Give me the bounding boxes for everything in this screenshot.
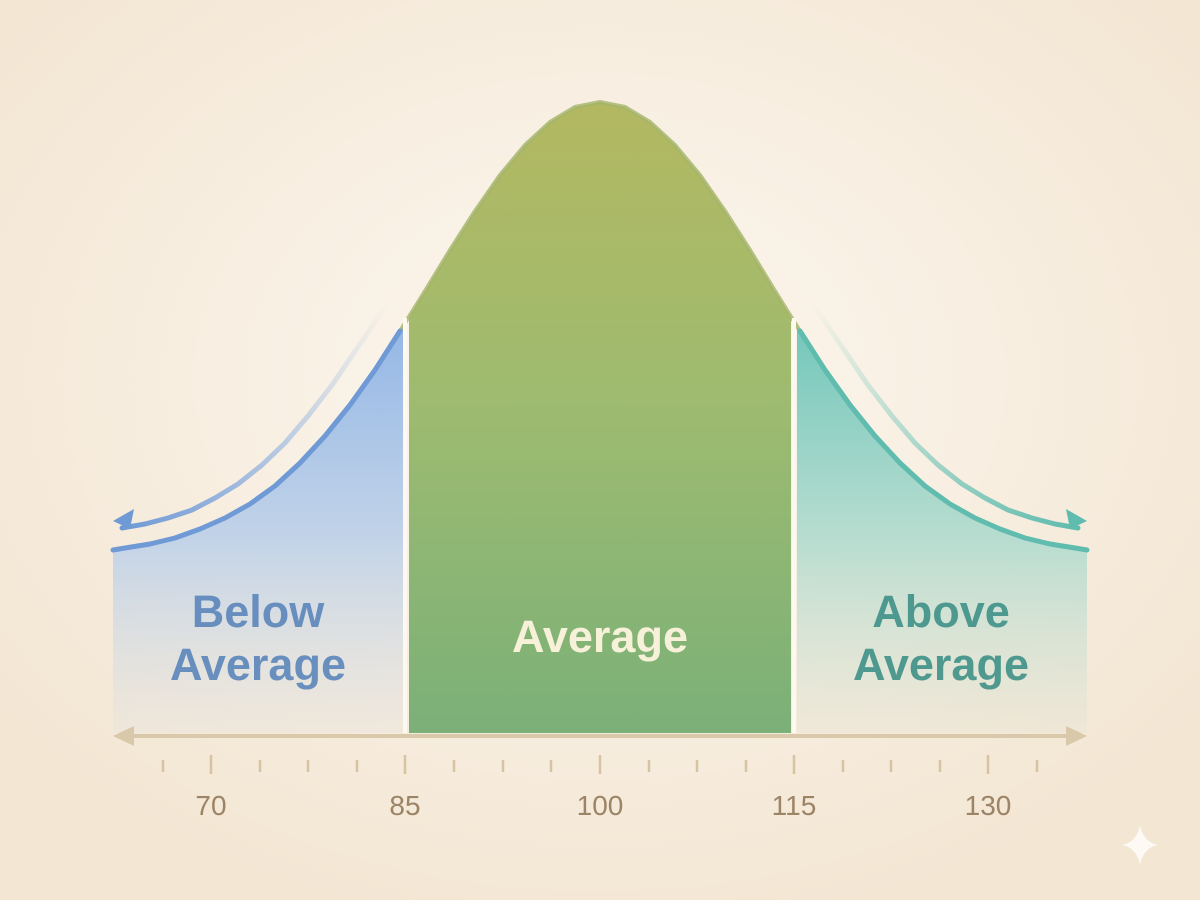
axis labels: 85 (389, 790, 421, 821)
label: below average: Below (192, 586, 325, 637)
arrow: left tail (113, 303, 388, 529)
region: above average (797, 300, 1087, 733)
label: above average: Above (872, 586, 1010, 637)
axis labels: 100 (577, 790, 623, 821)
icon: sparkle (1122, 825, 1158, 865)
arrow: right tail (812, 303, 1087, 529)
label: average: Average (512, 611, 688, 662)
text: Average (853, 639, 1029, 690)
x axis (113, 726, 1087, 774)
curve outline (400, 102, 800, 331)
divider lines (403, 318, 407, 733)
text: Average (170, 639, 346, 690)
axis labels (195, 790, 1011, 821)
axis labels: 115 (772, 790, 816, 821)
region: below average (113, 300, 403, 733)
bell curve chart (113, 90, 1087, 733)
region: average (409, 90, 791, 733)
axis labels: 130 (965, 790, 1011, 821)
axis labels: 70 (195, 790, 227, 821)
